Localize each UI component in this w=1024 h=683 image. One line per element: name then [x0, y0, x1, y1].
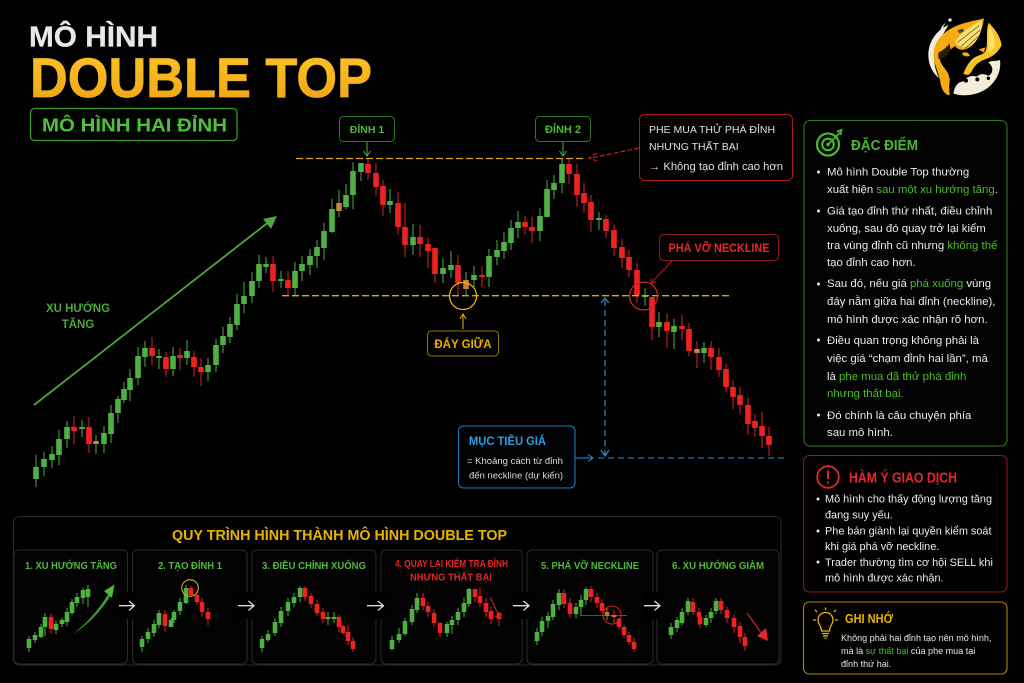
label: middle trough: ĐÁY GIỮA	[434, 338, 492, 351]
step 3 card	[252, 550, 376, 664]
step 5 card	[527, 550, 653, 664]
callout: price target: đến neckline (dự kiến)	[469, 470, 563, 482]
callout: failed breakout: PHE MUA THỬ PHÁ ĐỈNH	[649, 123, 775, 136]
bullet list: Mô hình cho thấy động lượng tăng	[825, 494, 992, 506]
label: middle trough	[428, 331, 498, 356]
subtitle badge	[30, 108, 237, 140]
arrow: uptrend	[34, 216, 277, 405]
arrow: step 3 to 4	[367, 592, 385, 619]
step 4 card: NHƯNG THẤT BẠI	[410, 570, 492, 584]
neckline	[282, 295, 731, 297]
bullet list: khi giá phá vỡ neckline.	[825, 541, 939, 553]
bullet list	[816, 494, 993, 584]
step 2 card: 2. TẠO ĐỈNH 1	[158, 559, 222, 572]
title line: MÔ HÌNH: MÔ HÌNH	[29, 20, 158, 54]
step 2 card	[132, 550, 247, 664]
heading: HÀM Ý GIAO DỊCH	[849, 468, 957, 486]
label: peak 2: ĐỈNH 2	[545, 123, 581, 136]
callout: price target: MỤC TIÊU GIÁ	[469, 435, 546, 448]
callout: failed breakout: → Không tạo đỉnh cao hơn	[649, 161, 783, 173]
arrow: step 2 to 3	[238, 592, 256, 619]
marker: middle trough circle	[450, 282, 476, 310]
bullet list: tạo đỉnh cao hơn.	[827, 257, 916, 269]
bullet list: nhưng thất bại.	[827, 388, 904, 400]
note text	[841, 633, 991, 669]
step 5 card: 5. PHÁ VỠ NECKLINE	[541, 559, 639, 572]
process heading: QUY TRÌNH HÌNH THÀNH MÔ HÌNH DOUBLE TOP	[172, 526, 507, 544]
step 6 card	[657, 550, 779, 664]
step 3 card: 3. ĐIỀU CHỈNH XUỐNG	[262, 558, 366, 572]
callout: failed breakout: NHƯNG THẤT BẠI	[649, 140, 739, 153]
note text: Không phải hai đỉnh tạo nên mô hình,	[841, 633, 991, 643]
step 1 card: 1. XU HƯỚNG TĂNG	[25, 559, 117, 572]
subtitle badge: MÔ HÌNH HAI ĐỈNH	[42, 114, 227, 136]
bullet list	[817, 166, 998, 439]
label: uptrend: XU HƯỚNG	[46, 302, 110, 315]
heading: ĐẶC ĐIỂM	[851, 136, 918, 154]
label: peak 1	[340, 116, 394, 156]
arrow: measured move	[601, 298, 609, 456]
title line: DOUBLE TOP: DOUBLE TOP	[30, 46, 372, 109]
bullet list: mô hình được xác nhận.	[825, 572, 944, 584]
note text: đỉnh thứ hai.	[841, 659, 891, 669]
marker: neckline break circle	[630, 282, 658, 310]
target price line	[598, 457, 786, 459]
arrow: trough label	[460, 314, 466, 329]
panel: characteristics	[804, 120, 1007, 446]
note text: mà là sự thất bại của phe mua tại	[841, 646, 975, 656]
callout: price target	[458, 426, 593, 488]
bullet list: Giá tạo đỉnh thứ nhất, điều chỉnh	[827, 206, 992, 218]
arrow: callout to peak 2	[589, 148, 639, 161]
title	[29, 20, 372, 109]
icon: warning	[817, 466, 839, 488]
step 4 card: 4. QUAY LẠI KIỂM TRA ĐỈNH	[395, 557, 508, 570]
bullet list: sau mô hình.	[827, 427, 893, 439]
bullet list: việc giá “chạm đỉnh hai lần”, mà	[827, 353, 988, 365]
bullet list: Mô hình Double Top thường	[827, 166, 969, 178]
bullet list: là phe mua đã thử phá đỉnh	[827, 371, 966, 383]
label: uptrend: TĂNG	[62, 318, 94, 331]
arrow: step 1 to 2	[119, 592, 136, 619]
bullet list: xuống, sau đó quay trở lại kiểm	[827, 223, 986, 235]
callout: failed breakout	[640, 114, 792, 180]
panel: trading implications	[804, 456, 1007, 592]
label: peak 2	[536, 116, 590, 156]
main candlestick chart	[36, 158, 769, 487]
panel: formation process	[14, 516, 781, 665]
bullet list: đang suy yếu.	[825, 510, 893, 522]
bullet list: Đó chính là câu chuyện phía	[827, 410, 972, 422]
arrow: step 5 to 6	[644, 592, 661, 619]
bullet list: tra vùng đỉnh cũ nhưng không thể	[827, 240, 997, 252]
heading: GHI NHỚ	[845, 611, 893, 626]
step 4 card	[381, 550, 522, 664]
icon: light bulb	[813, 608, 838, 638]
bullet list: Trader thường tìm cơ hội SELL khi	[825, 557, 993, 569]
step 6 card: 6. XU HƯỚNG GIẢM	[672, 559, 764, 572]
bullet list: mô hình được xác nhận rõ hơn.	[827, 314, 988, 326]
bullet list: Sau đó, nếu giá phá xuống vùng	[827, 278, 991, 290]
label: neckline break: PHÁ VỠ NECKLINE	[668, 242, 770, 255]
arrow: step 4 to 5	[513, 592, 530, 619]
icon: target	[817, 130, 842, 156]
bullet list: Điều quan trọng không phải là	[827, 335, 980, 347]
callout: price target: = Khoảng cách từ đỉnh	[467, 456, 563, 467]
label: peak 1: ĐỈNH 1	[350, 123, 384, 136]
resistance line at the peaks	[296, 158, 585, 160]
bullet list: Phe bán giành lại quyền kiểm soát	[825, 526, 992, 538]
icon: whale logo	[928, 18, 1002, 95]
panel: remember	[804, 602, 1007, 674]
bullet list: xuất hiện sau một xu hướng tăng.	[827, 184, 998, 196]
label: uptrend	[46, 302, 110, 331]
label: neckline break	[660, 234, 778, 260]
arrow: neckline break label	[651, 261, 672, 283]
bullet list: đáy nằm giữa hai đỉnh (neckline),	[827, 295, 995, 308]
step 1 card	[14, 550, 128, 664]
